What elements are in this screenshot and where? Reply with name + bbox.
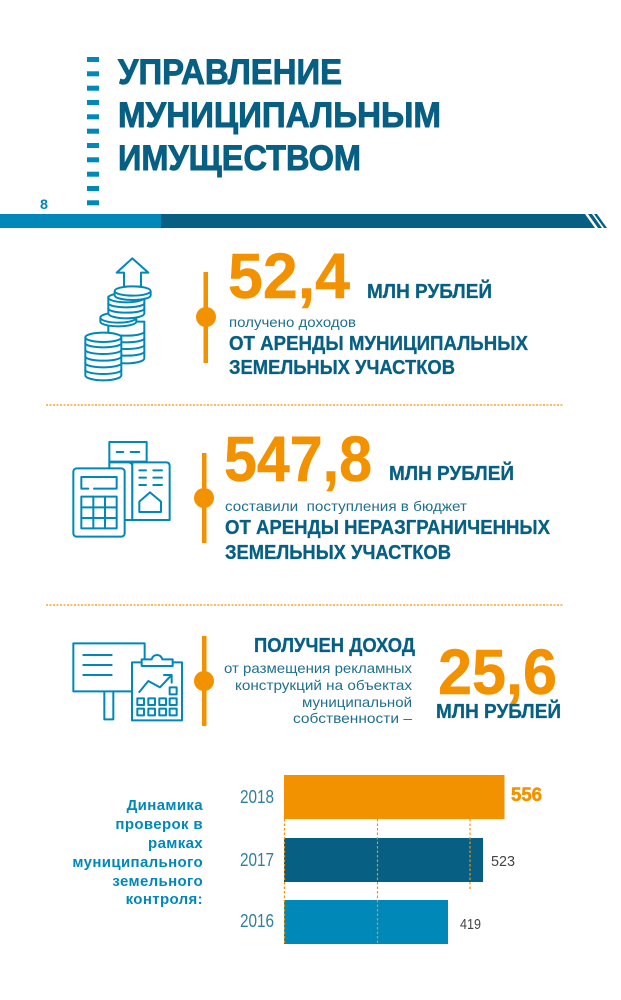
bar chart: 2016 — [240, 911, 274, 931]
icon: billboard and chart clipboard — [73, 643, 182, 720]
bar chart: 523 — [491, 853, 515, 870]
chart caption: проверок в — [115, 816, 203, 833]
block 1 text: ОТ АРЕНДЫ МУНИЦИПАЛЬНЫХ — [229, 333, 529, 355]
bar chart: 419 — [460, 916, 481, 933]
block 2 text: ЗЕМЕЛЬНЫХ УЧАСТКОВ — [225, 542, 451, 564]
block 2 text: МЛН РУБЛЕЙ — [389, 461, 514, 485]
dashed title marker — [87, 57, 99, 205]
title: УПРАВЛЕНИЕ — [118, 53, 342, 92]
block 1 text: получено доходов — [229, 314, 356, 330]
block 3 text: МЛН РУБЛЕЙ — [436, 699, 561, 723]
bar chart: 2018 — [240, 787, 274, 807]
bar chart: 556 — [511, 785, 542, 806]
chart caption — [72, 797, 203, 908]
block 1 text: 52,4 — [228, 240, 350, 312]
bar chart — [240, 775, 542, 944]
block 3 text — [224, 635, 561, 726]
chart caption: контроля: — [126, 891, 203, 908]
block 3 text: муниципальной — [302, 694, 412, 710]
marker 1 — [196, 272, 216, 363]
icon: coins with up arrow — [85, 258, 151, 380]
page number: 8 — [40, 196, 48, 212]
block 2 text: 547,8 — [224, 423, 372, 495]
block 3 text: ПОЛУЧЕН ДОХОД — [254, 635, 415, 657]
block 3 text: от размещения рекламных — [224, 660, 412, 676]
chart caption: Динамика — [127, 797, 203, 814]
chart caption: земельного — [112, 873, 203, 890]
block 1 text: МЛН РУБЛЕЙ — [367, 279, 492, 303]
block 1 text: ЗЕМЕЛЬНЫХ УЧАСТКОВ — [229, 357, 455, 379]
marker 3 — [194, 636, 214, 726]
bar chart: 2017 — [240, 850, 274, 870]
chart caption: муниципального — [72, 854, 203, 871]
marker 2 — [194, 453, 214, 543]
block 3 text: конструкций на объектах — [235, 677, 412, 693]
block 3 text: собственности – — [293, 710, 412, 726]
block 1 text — [228, 240, 529, 379]
icon: calculator and documents — [73, 442, 170, 537]
block 2 text: ОТ АРЕНДЫ НЕРАЗГРАНИЧЕННЫХ — [225, 517, 551, 539]
header band — [0, 214, 607, 228]
title: ИМУЩЕСТВОМ — [118, 139, 361, 178]
title — [118, 53, 441, 178]
block 2 text: составили поступления в бюджет — [225, 498, 468, 514]
chart caption: рамках — [148, 835, 203, 852]
block 2 text — [224, 423, 551, 564]
title: МУНИЦИПАЛЬНЫМ — [118, 96, 441, 135]
block 3 text: 25,6 — [438, 636, 557, 708]
